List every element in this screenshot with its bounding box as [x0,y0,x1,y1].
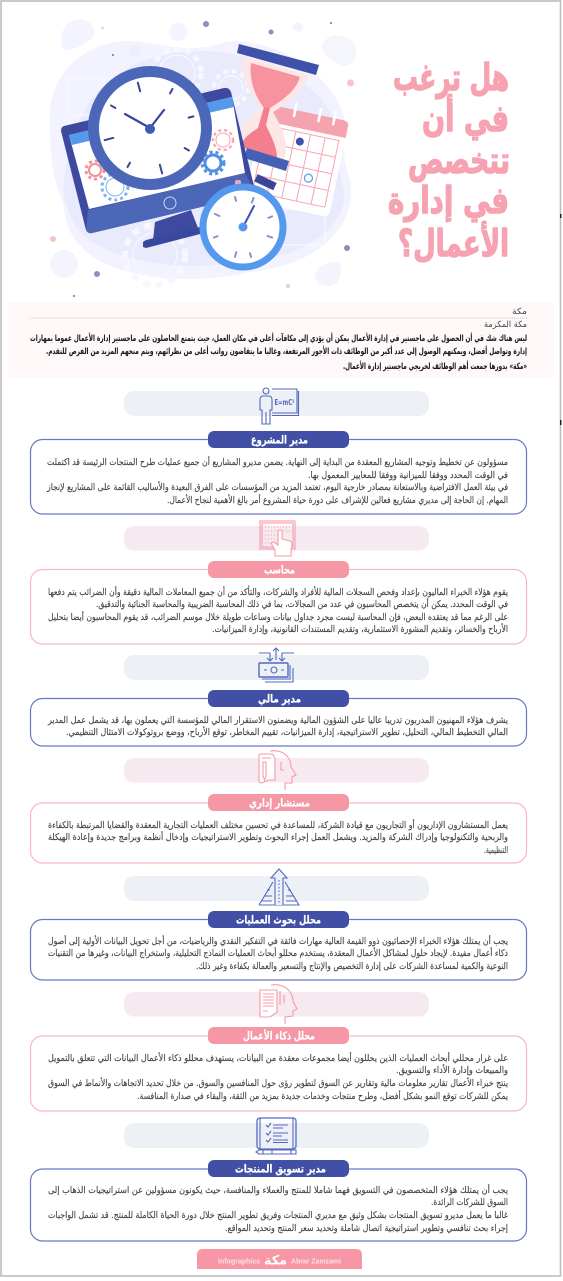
title: في إدارة [388,179,509,222]
card: accountant text: الأرباح والخسائر، وتقديم المشورة الاستثمارية، وتقديم المستندات القانونية، وإدارة الميزانيات. [212,623,508,635]
heading: project manager: مدير المشروع [251,434,308,446]
footer credit: Infographics [218,1258,260,1266]
panel: introduction: مكة المكرمة [484,320,527,330]
footer credit [197,1249,362,1269]
card: operations research analyst text [30,920,526,980]
heading: operations research analyst [208,911,349,928]
card: business intelligence analyst text: والمبيعات وإدارة الأداء والتسويق. [396,1064,508,1076]
hourglass [237,44,319,171]
icon: head with document [259,751,296,790]
title: تتخصص [408,139,510,182]
card: business intelligence analyst text [30,1036,526,1111]
heading: management consultant: مستشار إداري [249,796,310,810]
icon: checklist and pen [256,1118,296,1154]
heading: accountant: محاسب [264,564,295,576]
card: business intelligence analyst text: على غرار محللي أبحاث العمليات الذين يحللون أيضا مجموعات معقدة من البيانات، يستهدف محللو ذكاء الأعمال البيانات التي تتعلق بالتمويل [48,1052,508,1064]
card: financial manager text [30,698,526,746]
title: الأعمال؟ [398,220,509,265]
background blobs [50,20,356,286]
icon: teacher at formula board: E=mC² [274,398,294,407]
title: هل ترغب [393,56,509,99]
heading: financial manager: مدير مالي [258,692,301,706]
title: في أن [422,94,509,140]
title [388,56,510,265]
heading: business intelligence analyst [208,1027,349,1044]
stopwatch [203,174,283,267]
pale background gears and panels [67,49,325,285]
panel: product marketing manager [30,1118,526,1241]
panel: management consultant [30,751,526,863]
card: project manager text: في الوقت المحدد ووفقا للميزانية ووفقا للمعايير المعمول بها. [308,470,508,481]
heading: product marketing manager: مدير تسويق المنتجات [235,1162,326,1176]
card: management consultant text: التنظيمية. [484,845,508,856]
icon: teacher at formula board [260,388,298,424]
card: product marketing manager text [30,1169,526,1241]
heading: financial manager [208,690,349,707]
card: product marketing manager text: إجراء بحث تنافسي وتطوير استراتيجية اتصال شاملة وتحديد سعر المنتج وتحديد المواقع. [225,1223,508,1234]
calendar [245,98,350,217]
panel: operations research analyst [30,869,526,980]
panel: project manager [30,388,526,514]
decorative dots [50,21,354,297]
panel: introduction: مكة [512,307,527,317]
footer credit: مكة [264,1254,287,1268]
heading: product marketing manager [208,1160,349,1177]
illustration: clock, monitor, hourglass, calendar and stopwatch [50,20,356,297]
panel: financial manager [30,648,526,746]
heading: accountant [208,561,349,578]
icon: banknotes with arrows [259,648,294,682]
panel: accountant [30,521,526,644]
panel: introduction [8,303,554,378]
heading: management consultant [208,794,349,811]
card: accountant text [30,570,526,644]
card: operations research analyst text: النوعية والكمية لمساعدة الشركات على إدارة التخصيص والإنتاج والتسعير والعمالة بكفاءة وغير ذلك. [196,961,508,972]
footer credit: Abrar Zamzami [291,1258,341,1266]
monitor [61,88,256,248]
wall clock [94,72,206,184]
card: management consultant text: والربحية والتكنولوجيا وإدراك الشركة والمزيد. ويشمل العمل إجراء البحوث وتطوير الاستراتيجيات وإدخال أنظمة وبرامج جديدة وإعادة الهيكلة [48,831,508,843]
card: project manager text [30,440,526,514]
card: management consultant text [30,803,526,863]
card: financial manager text: يشرف هؤلاء المهنيون المدربون تدريبا عاليا على الشؤون المالية ويضمنون الاستقرار المالي للمؤسسة التي يعملون بها، قد يشمل عمل المدير [47,715,508,726]
panel: business intelligence analyst [30,985,526,1111]
icon: keypad and hand [260,521,295,556]
heading: operations research analyst: محلل بحوث العمليات [236,914,321,926]
card: product marketing manager text: السوق للشركات الرائدة. [431,1197,508,1208]
icon: head with report [260,985,297,1024]
heading: business intelligence analyst: محلل ذكاء الأعمال [243,1028,315,1042]
card: business intelligence analyst text: يمكن للشركات توقع النمو بشكل أفضل، وطرح منتجات وخدمات جديدة بمزيد من الثقة، والبقاء في صدارة المنافسة. [137,1090,508,1102]
heading: project manager [208,431,349,448]
card: product marketing manager text: يجب أن يمتلك هؤلاء المتخصصون في التسويق فهما شاملا للمنتج والعملاء والمنافسة، حيث يكونون مسؤولين عن استراتيجيات الذهاب إلى [48,1184,508,1196]
icon: pyramid with arrow [259,869,299,905]
